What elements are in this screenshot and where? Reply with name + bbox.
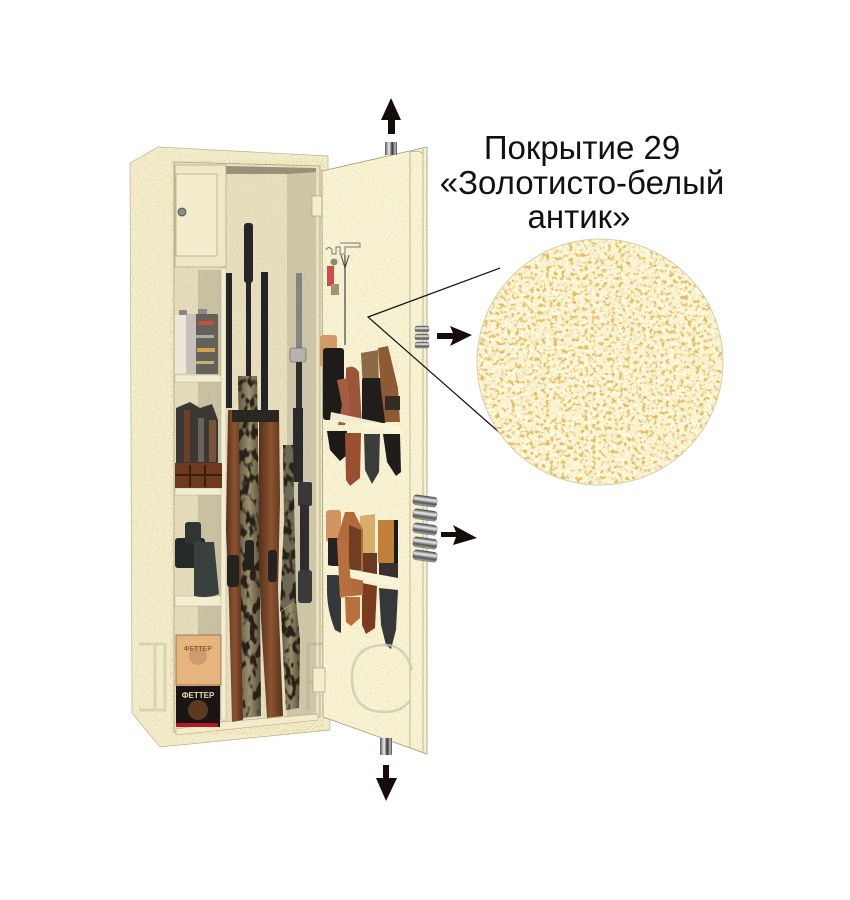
rifle 3 [259,272,283,718]
shelves [175,268,226,720]
middle side locking pins [415,326,429,348]
watermark circle on door [352,645,412,712]
top locking pin [385,142,397,155]
interior compartment [170,160,325,735]
bottom locking pin [380,738,392,755]
coating title [440,129,724,235]
rifles [226,223,312,722]
coating title: антик» [528,198,630,235]
rifle 1 [226,273,243,722]
lockbox with key lock [175,165,226,267]
arrow: right middle [437,326,472,346]
door hinge [312,196,325,216]
rifle 4 with scope [280,273,312,710]
arrow: down [376,765,397,801]
lower side locking pins [412,494,438,563]
safe body [130,146,330,748]
arrow: right lower [441,525,477,545]
key hook rack with keys [326,243,360,345]
coating swatch circle [477,239,723,485]
coating title: Покрытие 29 [484,129,680,166]
binoculars [175,522,219,597]
flask with lures [175,309,218,374]
arrow: up [381,98,401,134]
rifle 2 [238,223,261,718]
ammunition boxes: ФЕТТЕР [184,646,212,653]
watermark left letters [139,644,350,710]
callout leader lines [368,268,500,433]
upper row of knives [320,335,401,486]
coating title: «Золотисто-белый [440,164,724,201]
open door [313,145,430,757]
lower row of knives [326,510,398,649]
cabinet shell [125,140,335,752]
pistols in wooden rack [175,402,222,488]
lower door hinge [313,668,325,692]
ammunition boxes: ФЕТТЕР [182,691,215,700]
rifle rack bar [232,410,279,422]
ammunition boxes [176,635,221,727]
door panel [318,145,430,757]
